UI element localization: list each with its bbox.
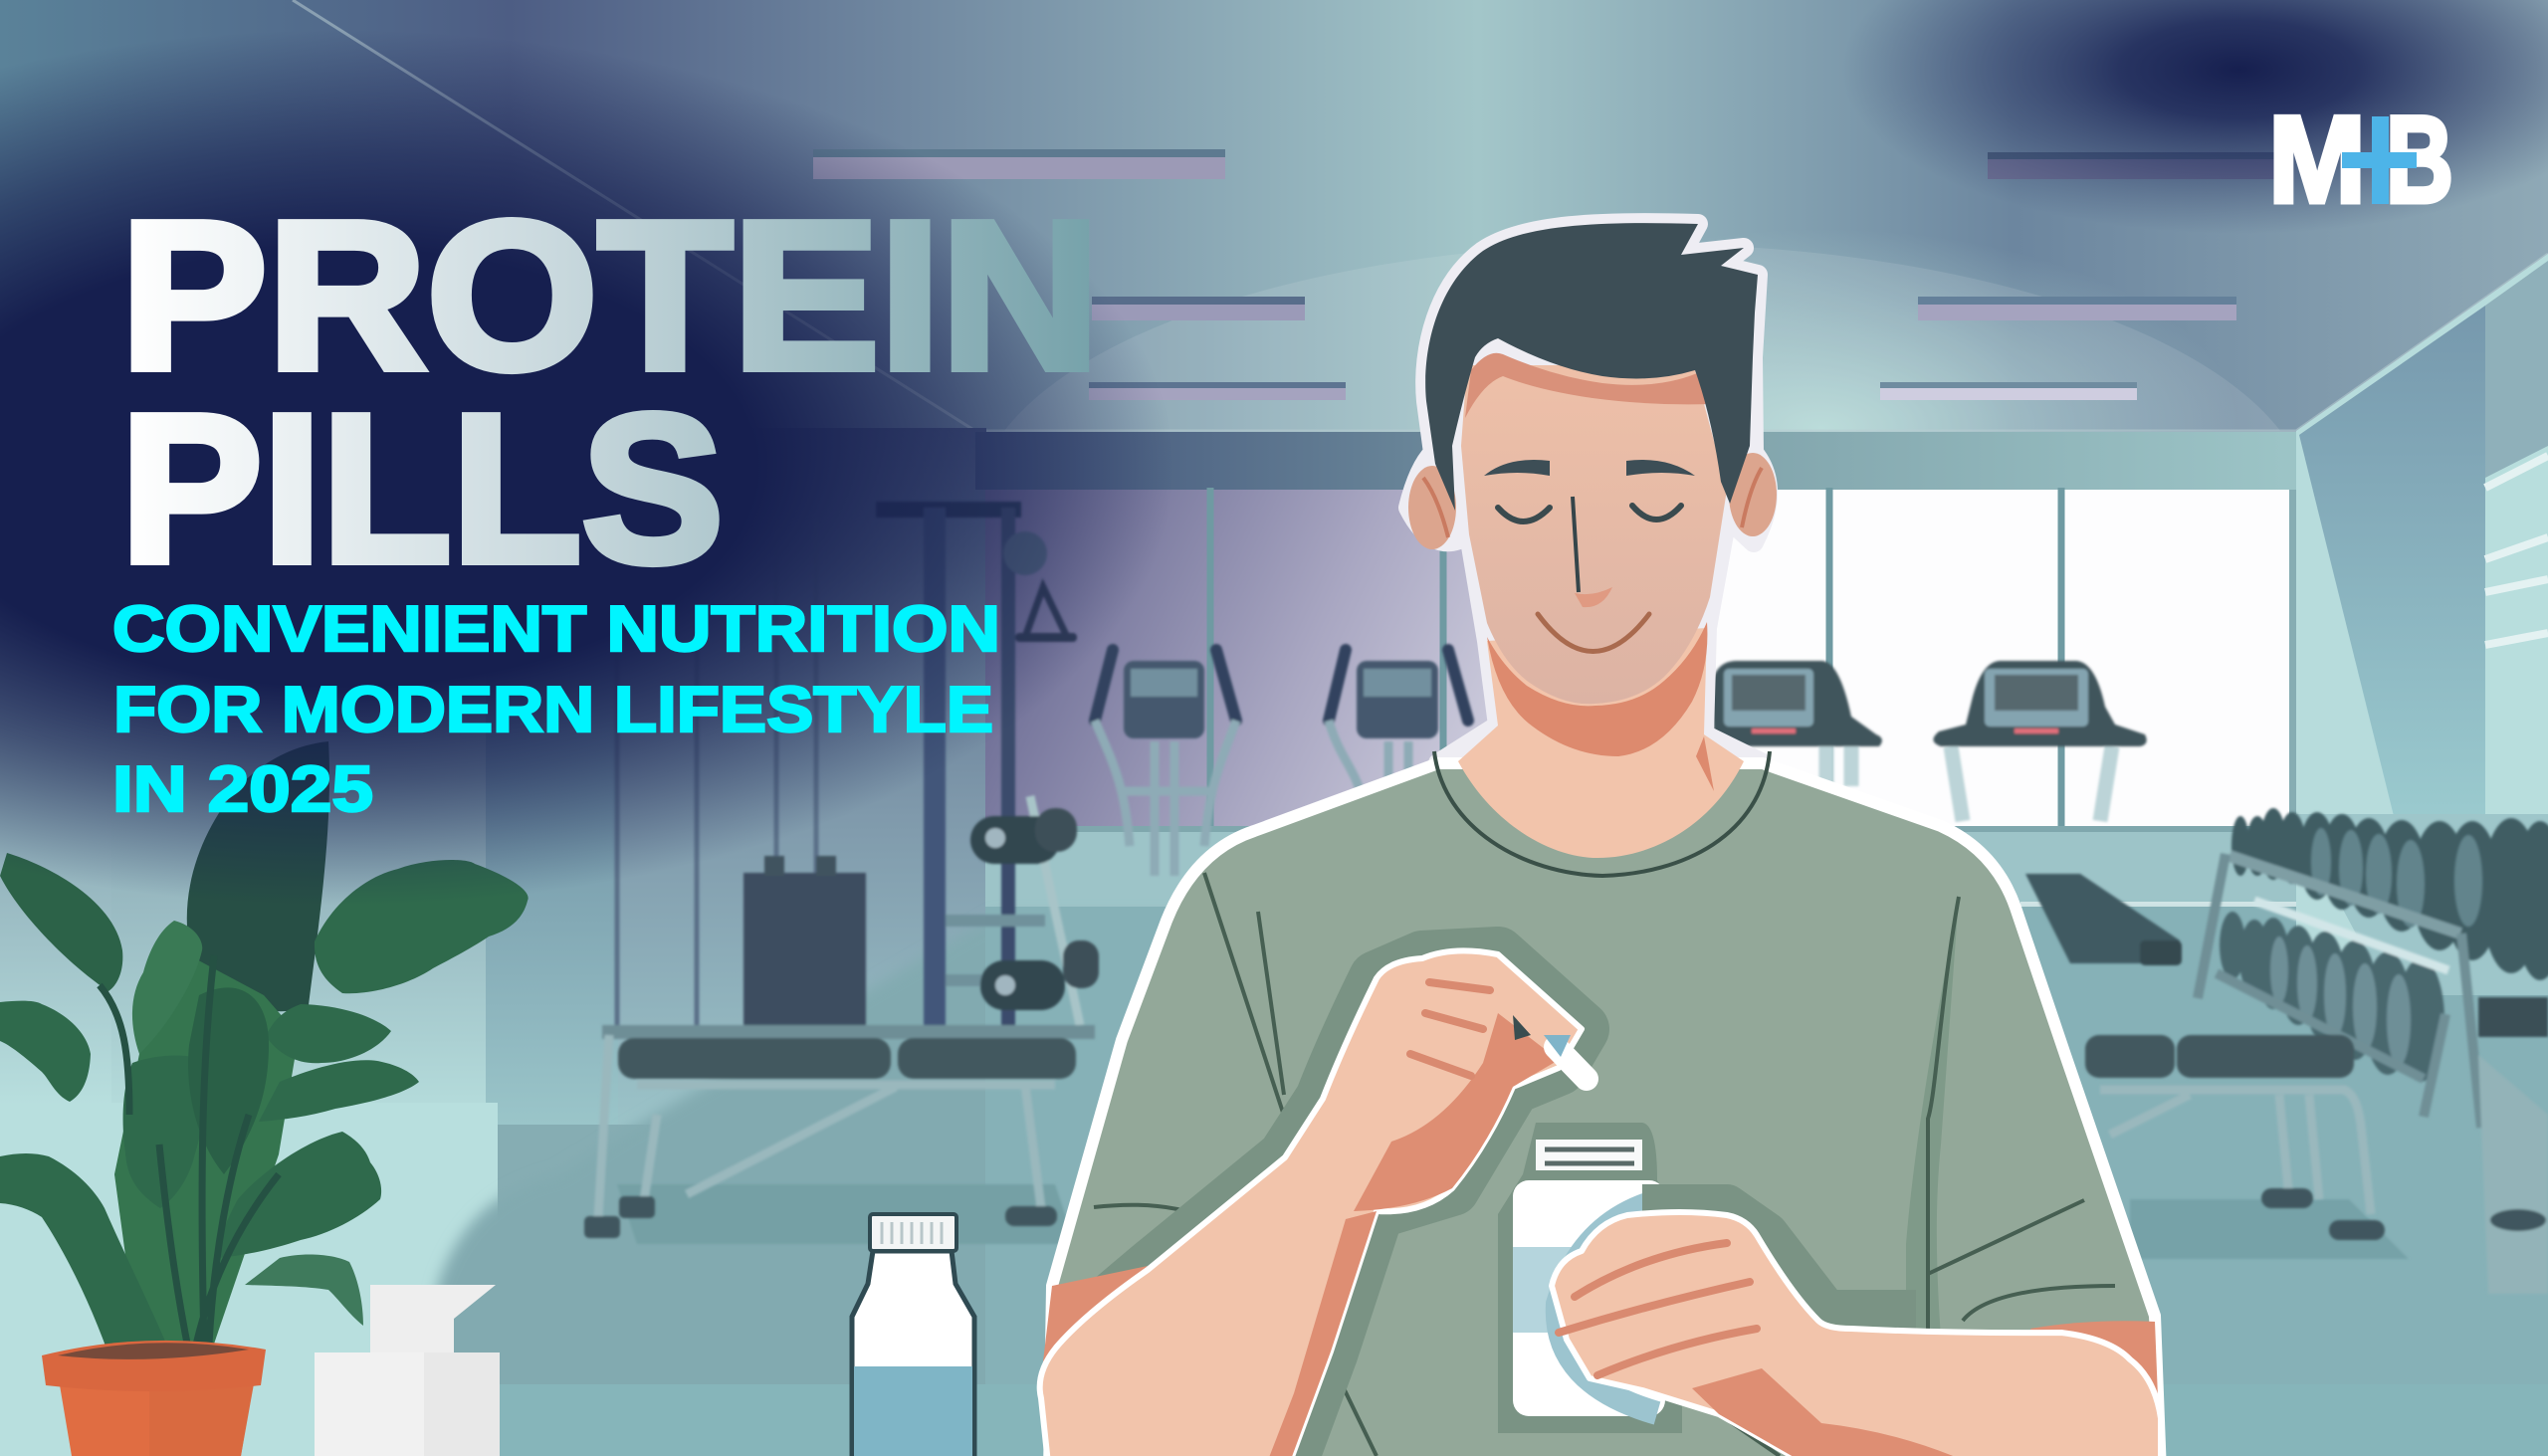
title [120,177,1100,606]
plant pot [42,1341,266,1456]
plant stems [100,955,279,1353]
header band above windows [975,432,2299,490]
gym equipment: elliptical machines [1095,650,1468,876]
shirt fold band [1906,897,1959,1456]
left sleeve opening [1041,1266,1148,1378]
head halo [1408,223,1768,763]
logo: B [2386,92,2453,229]
right wall [2296,254,2548,995]
roller pads [970,816,1060,864]
ceiling beam lines [293,0,2548,431]
logo: M [2268,92,2366,229]
logo [2268,92,2453,229]
title: PILLS [120,370,724,606]
shirt folds [1094,873,2115,1456]
weight stack [743,873,866,1029]
bench [602,1025,1095,1039]
icon: potted plant [0,741,529,1456]
supplement bottle [1498,1123,1682,1433]
person taking a pill [1040,223,2161,1456]
ceiling lights [813,149,2279,400]
nose [1573,497,1612,607]
gym equipment: dumbbell rack [2198,808,2548,1294]
right sleeve opening [2030,1321,2161,1456]
subtitle: IN 2025 [112,752,373,825]
smile [1538,614,1649,651]
t-shirt [1049,763,2161,1456]
icon: water bottle [852,1214,974,1456]
gym equipment: right bench [2085,1035,2385,1240]
subtitle [112,592,1000,825]
neck shadow [1487,622,1707,756]
closed eyes [1498,506,1681,521]
capsule pill [1544,1035,1587,1079]
gym equipment: cable machine and bench [584,502,1099,1238]
title: PROTEIN [120,177,1100,413]
plant leaves [0,853,122,991]
forehead shadow [1465,353,1712,418]
collar [1434,751,1770,876]
right arm and hand [1552,1206,2161,1456]
hair [1425,223,1758,511]
subtitle: FOR MODERN LIFESTYLE [113,673,993,745]
neck [1458,628,1744,858]
ears [1408,453,1777,549]
face [1461,365,1727,704]
lower wall and floor [985,832,2299,907]
left arm and hand [1040,950,1582,1456]
ceiling [0,0,2548,432]
subtitle: CONVENIENT NUTRITION [112,592,1000,665]
windows [985,490,1762,828]
gym equipment: treadmills [1711,661,2182,965]
eyebrows [1484,460,1695,476]
left wall [0,428,111,1105]
icon: white spray bottle [315,1285,500,1456]
